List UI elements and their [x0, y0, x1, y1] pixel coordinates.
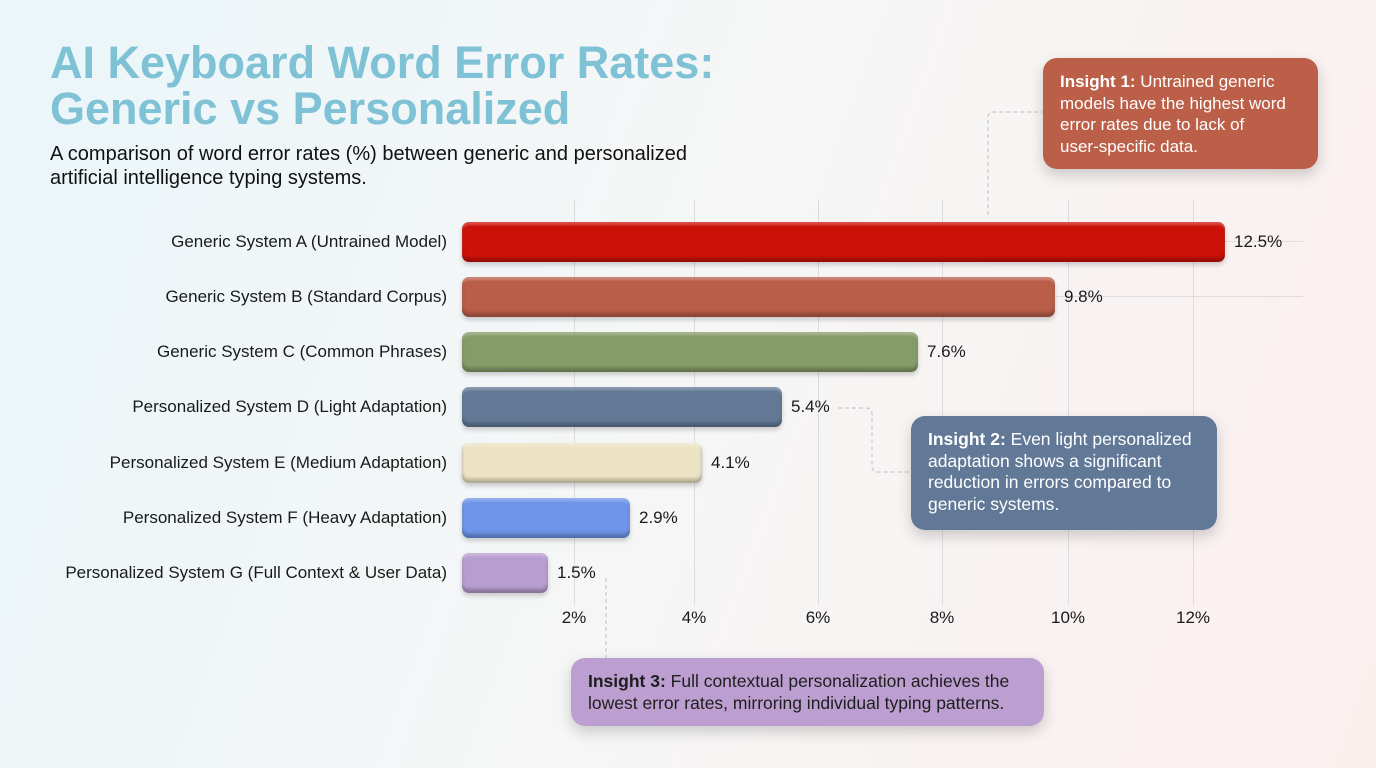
x axis ticks: 4% — [682, 608, 706, 627]
value labels: 2.9% — [639, 508, 678, 527]
category labels — [65, 232, 447, 582]
value labels: 4.1% — [711, 453, 750, 472]
category labels: Generic System A (Untrained Model) — [171, 232, 447, 251]
x axis ticks — [562, 608, 1210, 627]
chart — [65, 200, 1303, 627]
category labels: Personalized System G (Full Context & User Data) — [65, 563, 447, 582]
callout: insight 1 — [1043, 58, 1318, 169]
value labels: 1.5% — [557, 563, 596, 582]
callout: insight 2 — [911, 416, 1217, 530]
subtitle: artificial intelligence typing systems. — [50, 167, 367, 189]
category labels: Generic System B (Standard Corpus) — [165, 287, 447, 306]
x axis ticks: 10% — [1051, 608, 1085, 627]
title: AI Keyboard Word Error Rates: — [50, 37, 714, 88]
category labels: Personalized System D (Light Adaptation) — [132, 397, 447, 416]
x axis ticks: 2% — [562, 608, 586, 627]
value labels: 7.6% — [927, 342, 966, 361]
subtitle — [50, 143, 687, 189]
category labels: Generic System C (Common Phrases) — [157, 342, 447, 361]
callout: insight 3 — [571, 658, 1044, 726]
callout: insight 3: Insight 3: Full contextual personalization achieves the lowest error rates, mirroring individual typing patterns. — [588, 671, 1009, 712]
subtitle: A comparison of word error rates (%) between generic and personalized — [50, 143, 687, 165]
callout: insight 1: Insight 1: Untrained generic models have the highest word error rates due to lack of user-specific data. — [1060, 72, 1286, 156]
value labels: 5.4% — [791, 397, 830, 416]
callout: insight 2: Insight 2: Even light personalized adaptation shows a significant reduction in errors compared to generic systems. — [928, 429, 1192, 514]
category labels: Personalized System F (Heavy Adaptation) — [123, 508, 447, 527]
bars — [460, 222, 1227, 598]
value labels: 9.8% — [1064, 287, 1103, 306]
value labels: 12.5% — [1234, 232, 1282, 251]
x axis ticks: 8% — [930, 608, 954, 627]
category labels: Personalized System E (Medium Adaptation) — [110, 453, 447, 472]
title: Generic vs Personalized — [50, 83, 570, 134]
value labels — [557, 232, 1282, 582]
title — [50, 37, 714, 134]
x axis ticks: 6% — [806, 608, 830, 627]
x axis ticks: 12% — [1176, 608, 1210, 627]
